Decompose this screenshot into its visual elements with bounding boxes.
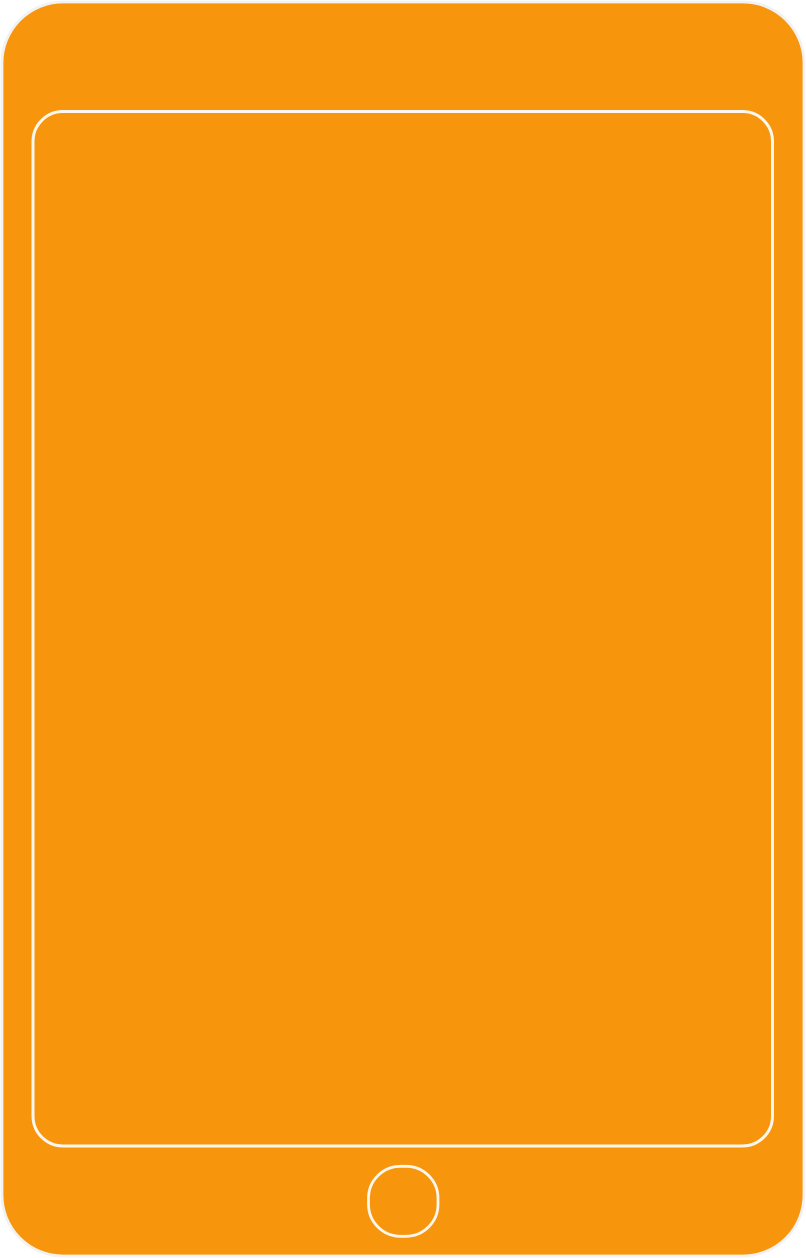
tablet screen outline — [33, 112, 772, 1146]
home button — [368, 1166, 438, 1236]
